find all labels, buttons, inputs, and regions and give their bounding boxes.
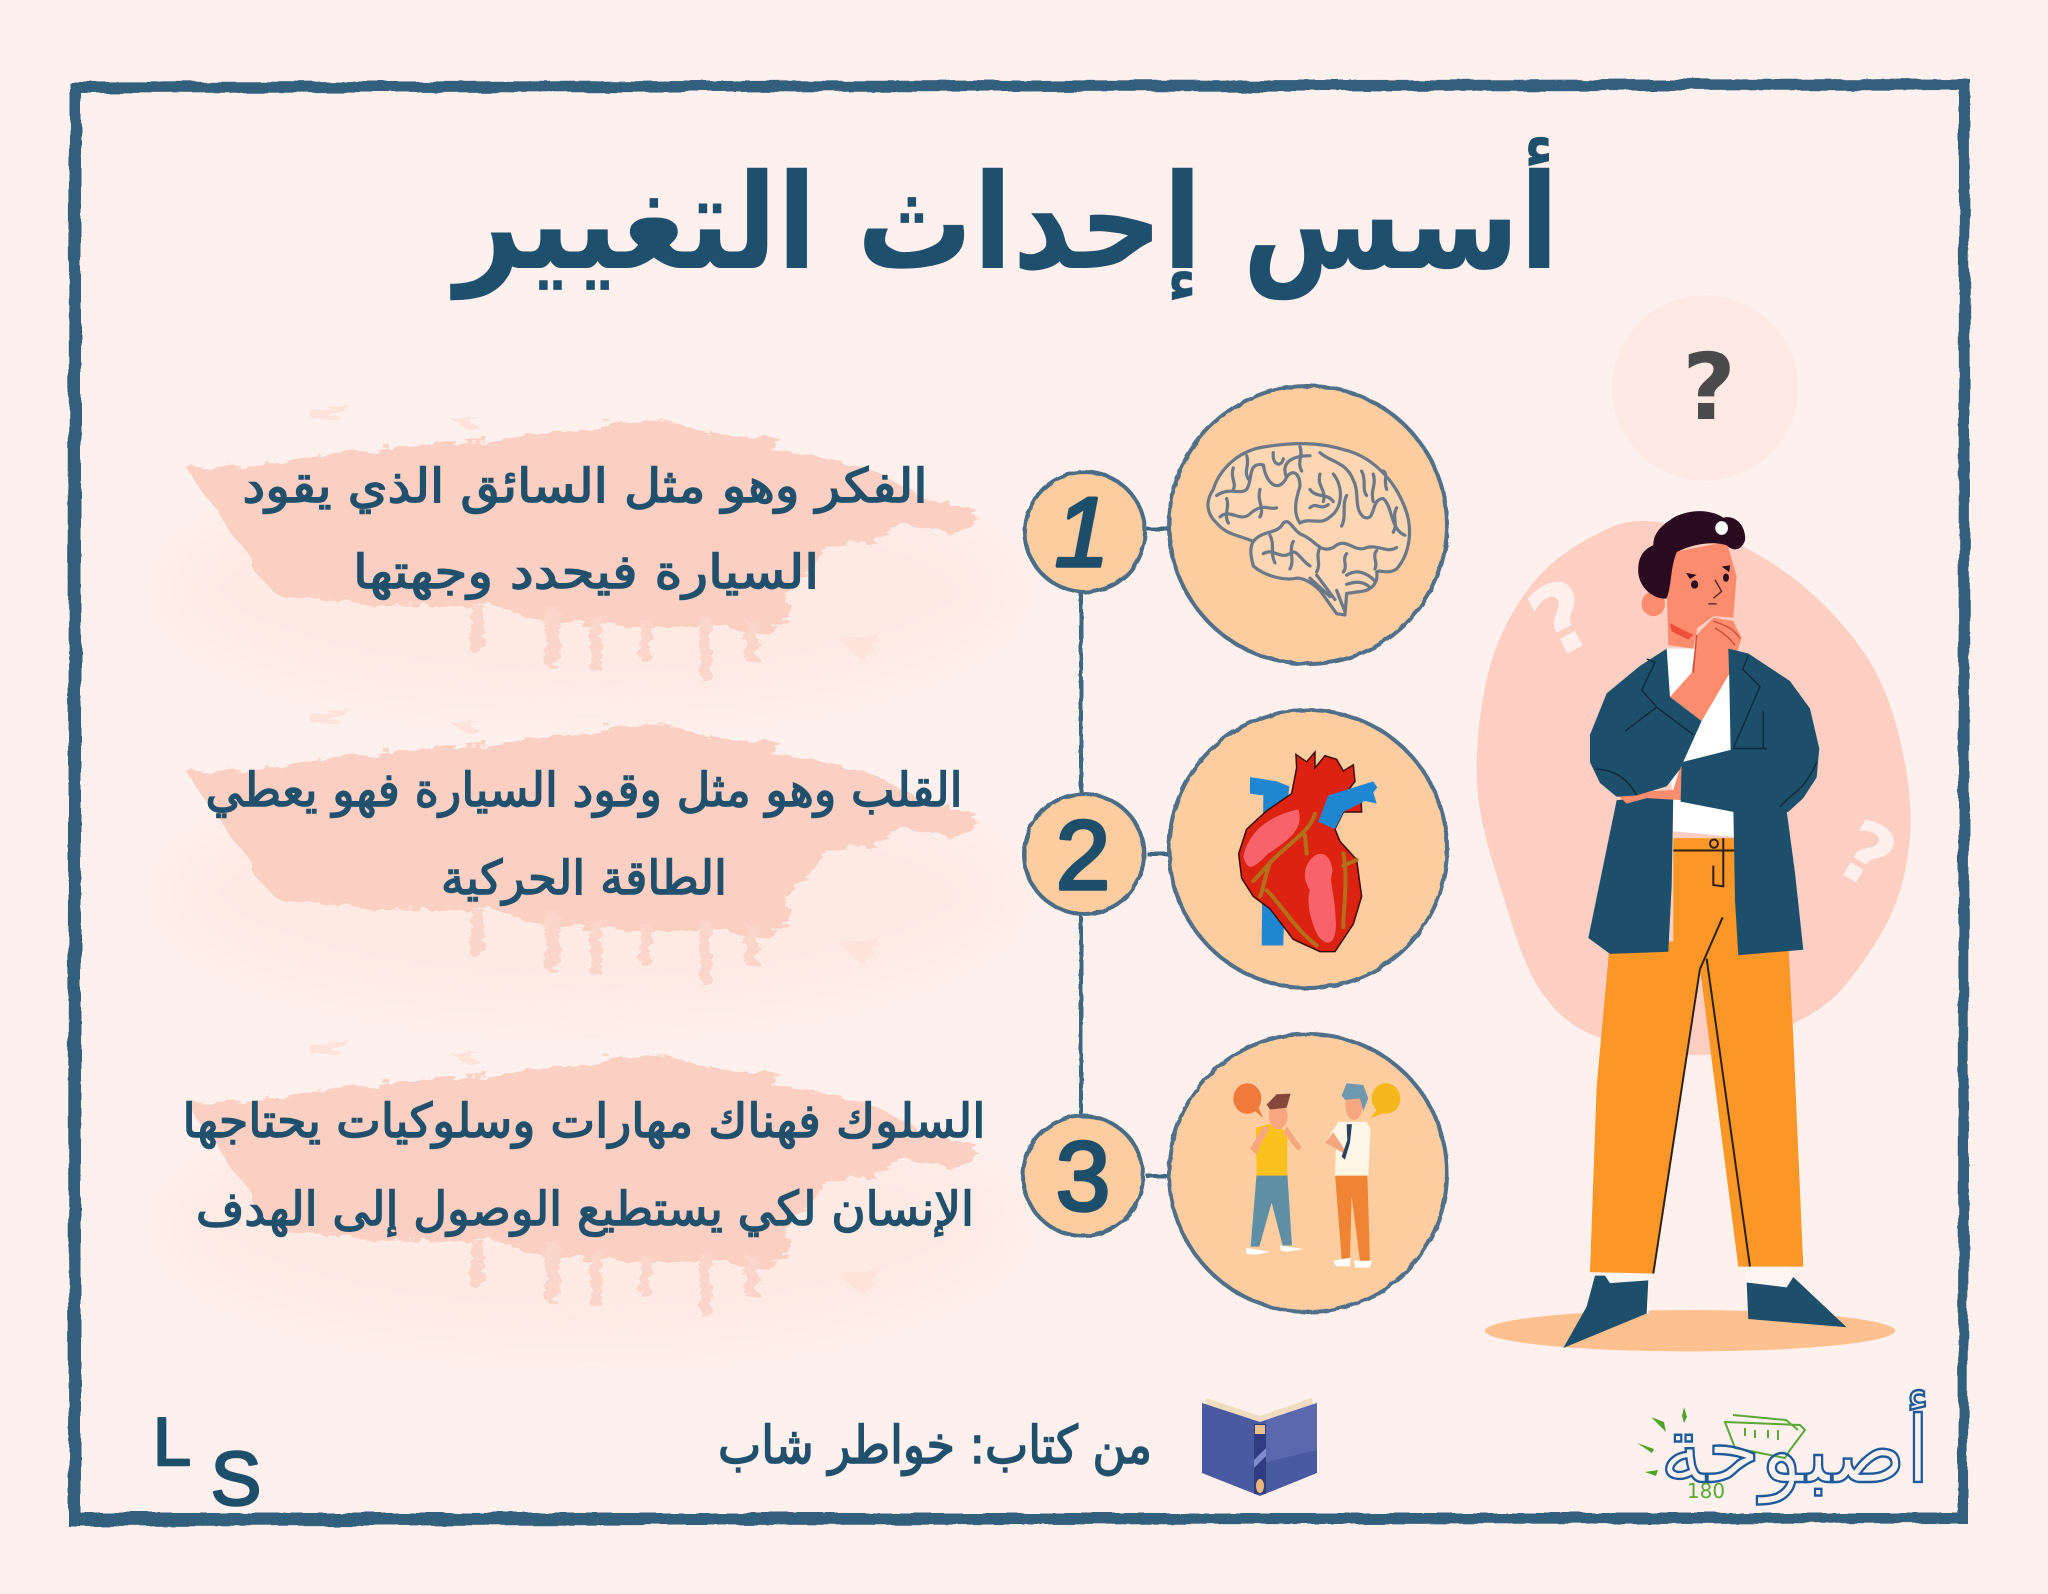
circle: brain bbox=[1169, 386, 1447, 664]
text block 2: الطاقة الحركية bbox=[441, 851, 727, 906]
circle: people bbox=[1169, 1034, 1447, 1312]
icon: brain bbox=[1208, 444, 1410, 615]
small pale question mark right: ? bbox=[1821, 800, 1912, 910]
icon: book bbox=[1202, 1398, 1317, 1496]
footer: initials: S bbox=[211, 1437, 261, 1522]
panel: thinking man illustration bbox=[1477, 295, 1912, 1351]
title: أسس إحداث التغيير bbox=[450, 137, 1559, 301]
logo: Osbouha 180 bbox=[1637, 1390, 1930, 1505]
step 1 number badge: 1 bbox=[1055, 477, 1109, 587]
footer: source text: من كتاب: خواطر شاب bbox=[718, 1416, 1152, 1476]
text block 3: السلوك فهناك مهارات وسلوكيات يحتاجها bbox=[182, 1094, 986, 1149]
panel: brush strokes and text bbox=[160, 404, 1020, 1355]
brush stroke 1 bbox=[160, 404, 1020, 720]
text block 2: القلب وهو مثل وقود السيارة فهو يعطي bbox=[206, 763, 962, 818]
text block 2 bbox=[206, 763, 962, 906]
thought bubble bbox=[1612, 295, 1798, 481]
logo rays and arch bbox=[1637, 1407, 1805, 1476]
text block 1: الفكر وهو مثل السائق الذي يقود bbox=[242, 459, 928, 514]
step 3 number badge: 3 bbox=[1056, 1121, 1110, 1231]
figure bbox=[1485, 511, 1895, 1351]
step 2 number badge bbox=[1024, 794, 1144, 914]
small pale question mark left: ? bbox=[1512, 556, 1613, 681]
icon: heart bbox=[1239, 752, 1377, 952]
icon: arguing person in yellow bbox=[1233, 1083, 1304, 1255]
logo number: 180 bbox=[1687, 1479, 1725, 1503]
text block 1: السيارة فيحدد وجهتها bbox=[353, 545, 819, 600]
step 2 number badge: 2 bbox=[1056, 800, 1110, 910]
text block 3: الإنسان لكي يستطيع الوصول إلى الهدف bbox=[196, 1182, 974, 1237]
icon: arguing person in white shirt bbox=[1325, 1083, 1400, 1267]
logo wordmark: أصبوحة bbox=[1660, 1390, 1930, 1505]
pink background blob bbox=[1477, 521, 1910, 1055]
question mark: ? bbox=[1682, 334, 1736, 441]
brush stroke 3 bbox=[160, 1039, 1020, 1355]
footer: initials bbox=[153, 1404, 261, 1522]
step 1 number badge bbox=[1025, 472, 1145, 592]
step 3 number badge bbox=[1023, 1116, 1143, 1236]
text block 3 bbox=[182, 1094, 986, 1237]
brush stroke 2 bbox=[160, 708, 1020, 1024]
circle: heart bbox=[1169, 710, 1447, 988]
text block 1 bbox=[242, 459, 928, 600]
footer: initials: L bbox=[153, 1404, 191, 1480]
timeline connectors bbox=[1081, 529, 1168, 1176]
